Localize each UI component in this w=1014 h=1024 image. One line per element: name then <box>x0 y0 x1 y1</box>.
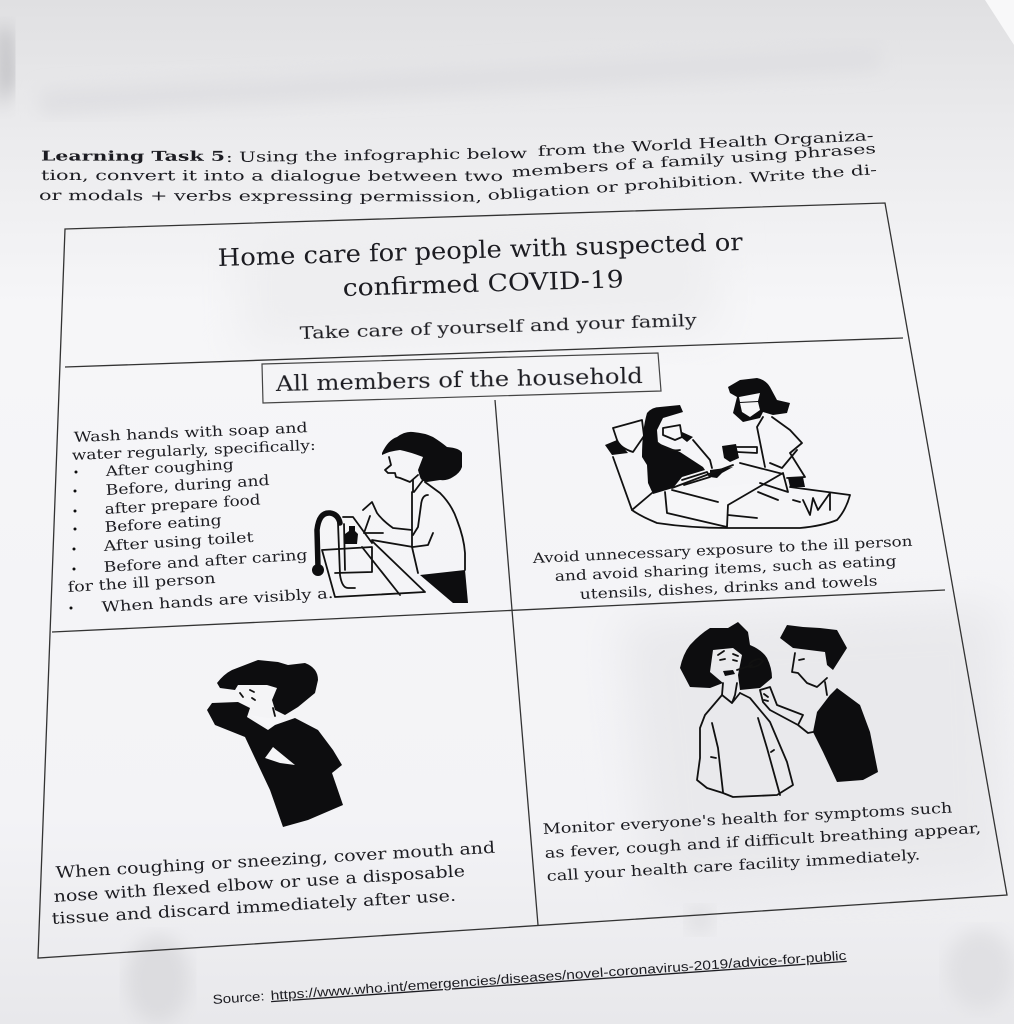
subtitle: Take care of yourself and your family <box>300 311 697 344</box>
instructions heading: members of a family using phrases <box>511 141 876 181</box>
panel: hand washing text: Before and after caring <box>103 548 308 576</box>
instructions heading: tion, convert it into a dialogue between two <box>41 168 503 185</box>
instructions heading: : Using the infographic below <box>226 146 527 166</box>
panel: avoid exposure text <box>531 534 913 603</box>
source line: Source: <box>212 988 265 1007</box>
panel: hand washing text: water regularly, specifically: <box>71 438 316 464</box>
source line: https://www.who.int/emergencies/diseases/novel-coronavirus-2019/advice-for-public <box>270 948 847 1003</box>
panel: coughing text: tissue and discard immediately after use. <box>51 886 457 928</box>
panel: monitor text: as fever, cough and if difficult breathing appear, <box>544 821 982 862</box>
panel: hand washing text: When hands are visibly a. <box>101 586 334 616</box>
icon: checking temperature <box>680 622 878 797</box>
instructions heading: Learning Task 5 <box>41 149 225 165</box>
panel: hand washing text: Wash hands with soap and <box>73 420 308 446</box>
panel: avoid exposure text: utensils, dishes, drinks and towels <box>579 573 878 603</box>
infographic frame <box>38 203 1007 958</box>
icon: person coughing into elbow <box>207 660 343 827</box>
instructions heading: from the World Health Organiza- <box>537 128 874 160</box>
panel: hand washing text <box>67 420 334 616</box>
panel: hand washing text: Before, during and <box>105 473 270 499</box>
panel: coughing text: When coughing or sneezing, cover mouth and <box>55 838 496 882</box>
instructions heading <box>39 128 878 206</box>
icon: caregiver and ill person <box>605 378 850 528</box>
icon: woman washing hands <box>312 432 468 603</box>
household label box: All members of the household <box>274 364 643 396</box>
panel: avoid exposure text: Avoid unnecessary exposure to the ill person <box>531 534 913 567</box>
panel: hand washing text: Before eating <box>104 513 222 536</box>
panel: monitor text <box>542 801 982 885</box>
panel: hand washing text: for the ill person <box>67 571 216 596</box>
panel: monitor text: Monitor everyone's health for symptoms such <box>542 801 953 838</box>
title: confirmed COVID-19 <box>342 265 624 302</box>
panel: avoid exposure text: and avoid sharing items, such as eating <box>554 553 897 585</box>
panel: coughing text <box>51 838 496 928</box>
panel: hand washing text: after prepare food <box>104 492 261 518</box>
panel: coughing text: nose with flexed elbow or use a disposable <box>53 861 465 906</box>
panel: monitor text: call your health care facility immediately. <box>546 847 921 885</box>
household label box <box>262 353 661 403</box>
source line <box>212 948 847 1007</box>
panel: hand washing text: After coughing <box>104 457 234 480</box>
instructions heading: obligation or prohibition. Write the di- <box>487 162 878 204</box>
title: Home care for people with suspected or <box>217 228 743 272</box>
title <box>217 228 743 302</box>
panel: hand washing text: After using toilet <box>102 530 254 555</box>
instructions heading: or modals + verbs expressing permission, <box>39 188 482 206</box>
